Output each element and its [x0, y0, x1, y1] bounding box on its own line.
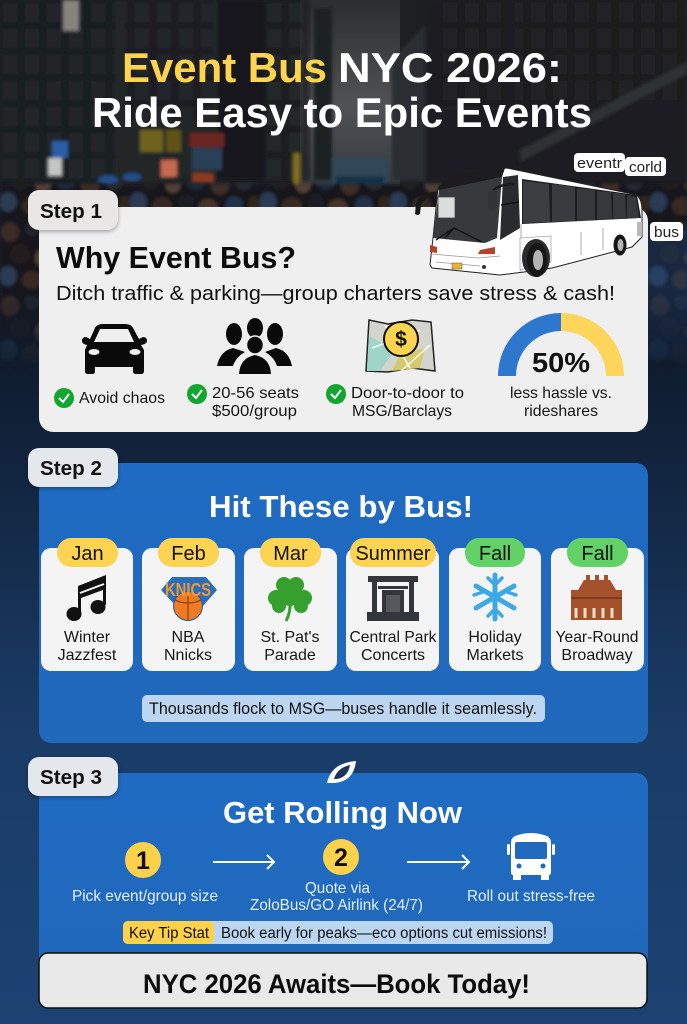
panel: events [39, 463, 648, 743]
benefit: door-to-door [326, 384, 464, 420]
card: winter jazzfest: Jazzfest [58, 647, 117, 664]
card: central park concerts: Summer [356, 543, 431, 565]
card: nba knicks [142, 538, 235, 671]
callout: thousands flock to MSG: Thousands flock to MSG—buses handle it seamlessly. [149, 699, 537, 718]
callout: key tip: Key Tip Stat [129, 925, 210, 942]
icon: group of people [217, 318, 292, 374]
card: st pats parade: Parade [264, 647, 316, 664]
card: year-round broadway: Year-Round [556, 629, 638, 646]
benefit: seats and price [187, 384, 299, 420]
benefit: seats and price: 20-56 seats [212, 385, 299, 402]
tag: bus [650, 222, 683, 241]
chart: 50% gauge: 50% [532, 347, 590, 378]
step text: roll out: Roll out stress-free [467, 888, 595, 905]
call to action banner: NYC 2026 Awaits—Book Today! [143, 969, 530, 999]
heading: get rolling now: Get Rolling Now [223, 795, 463, 830]
step marker 2 [323, 839, 359, 875]
heading: why event bus: Why Event Bus? [56, 240, 296, 275]
step marker 1: 1 [136, 847, 150, 875]
icon: map with dollar coin [366, 320, 435, 372]
card: year-round broadway: Fall [581, 543, 614, 565]
card: nba knicks: Feb [171, 543, 206, 565]
title: Ride Easy to Epic Events [92, 89, 592, 136]
card: winter jazzfest: Winter [64, 629, 111, 646]
icon: car [82, 324, 147, 374]
panel: why event bus [39, 207, 648, 432]
card: holiday markets: Fall [479, 543, 511, 565]
badge: step 2 [28, 448, 118, 487]
benefit: avoid chaos: Avoid chaos [79, 390, 165, 407]
card: holiday markets [449, 538, 541, 671]
callout: key tip [123, 921, 553, 944]
benefit: door-to-door: Door-to-door to [351, 385, 464, 402]
card: winter jazzfest [41, 538, 133, 671]
title [92, 44, 592, 136]
title: NYC 2026: [338, 44, 562, 91]
badge: step 3 [28, 757, 118, 796]
tag: eventr: eventr [577, 155, 622, 172]
card: st pats parade: St. Pat's [260, 629, 320, 646]
card: winter jazzfest: Jan [71, 543, 104, 565]
card: holiday markets: Holiday [468, 629, 522, 646]
icon: bus [507, 833, 555, 880]
title: Event Bus [122, 44, 327, 91]
icon: leaf [327, 761, 356, 783]
call to action banner [39, 953, 647, 1008]
callout: thousands flock to MSG [142, 695, 545, 722]
callout: key tip: Book early for peaks—eco options cut emissions! [221, 925, 547, 942]
step text: pick event: Pick event/group size [72, 888, 218, 905]
card: holiday markets: Markets [467, 647, 523, 664]
arrow 1 [213, 855, 274, 869]
gauge caption: less hassle vs. [510, 385, 612, 402]
chart: 50% gauge [498, 313, 624, 378]
step text: quote [250, 880, 423, 914]
subheading: Ditch traffic & parking—group charters save stress & cash! [56, 282, 615, 305]
gauge caption [510, 385, 612, 420]
gauge caption: rideshares [524, 403, 598, 420]
benefit: avoid chaos [54, 388, 165, 408]
tag: corld: corld [629, 159, 662, 176]
card: st pats parade [244, 538, 337, 671]
step text: quote: Quote via [305, 880, 370, 897]
card: central park concerts [346, 538, 439, 671]
card: central park concerts: Central Park [350, 629, 437, 646]
card: nba knicks: NBA [172, 629, 205, 646]
badge: step 2: Step 2 [40, 458, 102, 480]
card: nba knicks: Nnicks [164, 647, 212, 664]
arrow 2 [407, 855, 469, 869]
card: central park concerts: Concerts [361, 647, 425, 664]
card: year-round broadway: Broadway [561, 647, 633, 664]
tag: bus: bus [654, 224, 679, 241]
step marker 2: 2 [334, 844, 348, 872]
step marker 1 [125, 842, 161, 878]
panel: get rolling now [39, 761, 648, 973]
card: year-round broadway [551, 538, 644, 671]
badge: step 3: Step 3 [40, 767, 102, 789]
heading: hit these by bus: Hit These by Bus! [209, 489, 473, 524]
card: nba knicks: KNICS [165, 580, 211, 600]
card: st pats parade: Mar [273, 543, 308, 565]
badge: step 1 [28, 190, 118, 230]
step text: quote: ZoloBus/GO Airlink (24/7) [250, 897, 423, 914]
icon: map with dollar coin: $ [395, 328, 407, 351]
benefit: door-to-door: MSG/Barclays [352, 403, 452, 420]
illustration: white coach bus [415, 168, 642, 277]
badge: step 1: Step 1 [40, 201, 102, 223]
benefit: seats and price: $500/group [212, 403, 297, 420]
